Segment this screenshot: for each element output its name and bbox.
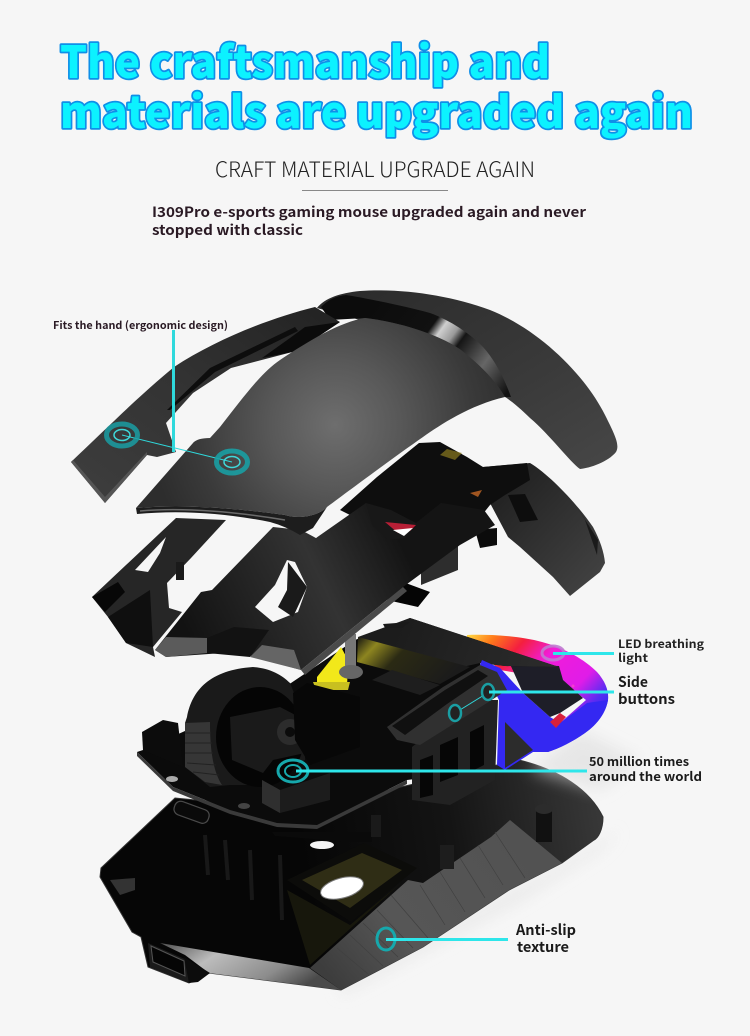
middle frame (92, 442, 605, 675)
callout: LED light: LED breathing (618, 636, 704, 652)
textured grip strip (310, 820, 562, 990)
glossy band (321, 295, 511, 397)
rainbow LED ring (467, 635, 640, 790)
base shell (100, 760, 620, 995)
callout: LED light (542, 636, 704, 666)
intro text: I309Pro e-sports gaming mouse upgraded again and never (152, 202, 587, 222)
marker: left fin (106, 424, 138, 446)
top shell (71, 290, 617, 535)
left connector box (142, 720, 183, 767)
title (60, 27, 693, 141)
back arch (483, 463, 605, 596)
posts and flap (475, 528, 497, 548)
callout: anti-slip: Anti-slip (515, 919, 576, 940)
front plate (136, 318, 505, 517)
callout: side buttons: Side (618, 671, 648, 692)
callout: ergonomic design (53, 318, 248, 473)
title: The craftsmanship and (60, 27, 550, 91)
exploded mouse illustration (71, 290, 640, 995)
circuit board (137, 618, 559, 829)
metal front edge (160, 943, 341, 990)
marker: front plate (216, 451, 248, 473)
posts (371, 815, 381, 837)
subtitle: CRAFT MATERIAL UPGRADE AGAIN (215, 154, 535, 184)
yellow lit column (317, 647, 348, 688)
callout: 50 million: 50 million times (589, 751, 689, 770)
central shell (155, 503, 495, 670)
front port (148, 943, 189, 983)
callout: ergonomic design: Fits the hand (ergonomic design) (53, 318, 228, 333)
scroll wheel (185, 667, 305, 787)
front lips (155, 637, 207, 657)
USB port (172, 800, 211, 825)
switch block (262, 773, 330, 813)
callout: 50 million: around the world (589, 766, 702, 785)
callout: 50 million (278, 751, 702, 785)
intro text: stopped with classic (152, 220, 303, 240)
callout: anti-slip (377, 919, 576, 957)
callout: side buttons (449, 671, 675, 721)
encoder (230, 707, 305, 773)
callout: side buttons: buttons (618, 688, 675, 709)
red reveal (366, 503, 416, 540)
left fin (71, 307, 340, 503)
central shell window (255, 560, 307, 622)
ring interior (510, 664, 583, 717)
sensor window (287, 843, 417, 922)
back shell (317, 290, 617, 469)
left frame (92, 518, 226, 657)
side button block (412, 700, 498, 805)
intro text (152, 202, 587, 240)
title: materials are upgraded again (60, 77, 693, 141)
callout: LED light: light (618, 650, 648, 666)
inner structure (340, 442, 530, 540)
callout: anti-slip: texture (517, 936, 569, 957)
side buttons (387, 665, 507, 745)
